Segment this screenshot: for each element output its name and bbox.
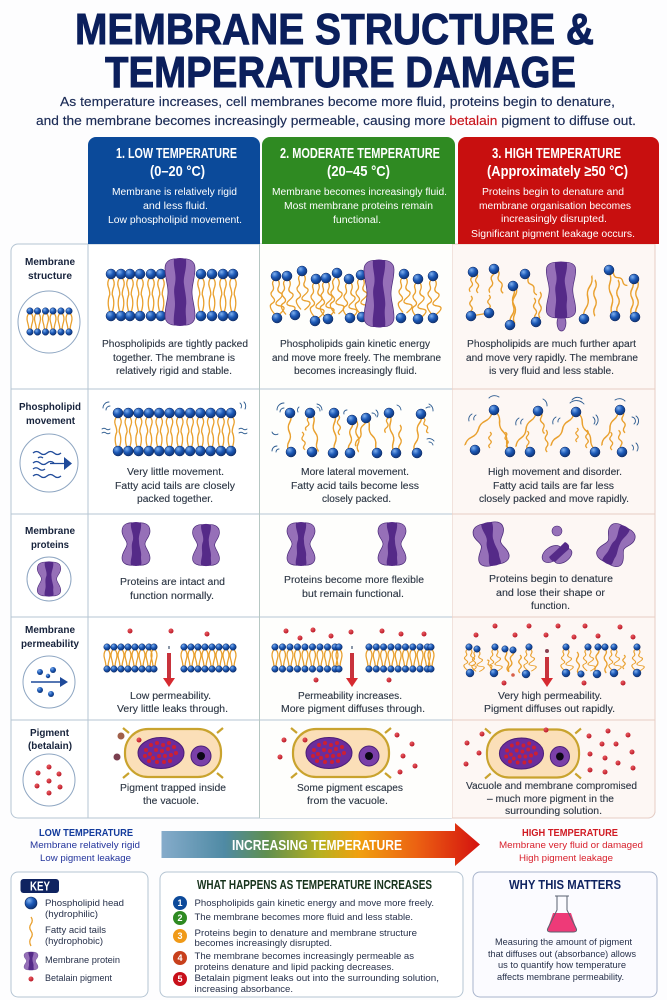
column header: low temperature: (0–20 °C) <box>150 163 205 180</box>
subtitle: As temperature increases, cell membranes become more fluid, proteins begin to denature, <box>60 94 615 109</box>
key: fatty acid tails: Fatty acid tails <box>45 925 106 936</box>
column header: low temperature: 1. LOW TEMPERATURE <box>116 145 237 162</box>
step 4: proteins denature and lipid packing decreases. <box>194 962 394 973</box>
step 4 <box>173 951 414 973</box>
text: fluid membrane: and move more freely. The membrane <box>272 353 441 364</box>
text: some pigment escapes <box>297 783 403 807</box>
title: MEMBRANE STRUCTURE & <box>75 5 594 54</box>
diagram: high movement and disorder <box>464 396 639 457</box>
text: trapped pigment: Pigment trapped inside <box>120 783 226 794</box>
text: flexible proteins: Proteins become more flexible <box>284 575 424 586</box>
low temperature summary: Low pigment leakage <box>40 853 131 864</box>
diagram: disordered membrane with damaged protein <box>466 261 640 331</box>
text: very little movement <box>115 467 235 505</box>
row label: membrane proteins: proteins <box>31 539 69 551</box>
row label: membrane permeability <box>21 624 79 650</box>
text: compromised cell: surrounding solution. <box>505 806 602 817</box>
icon: flask <box>547 896 577 932</box>
text: increased permeability: Permeability increases. <box>298 691 402 702</box>
text: very high permeability: Very high permeability. <box>498 691 602 702</box>
text: intact proteins <box>120 577 225 602</box>
text: increased permeability: More pigment diffuses through. <box>281 704 425 715</box>
arrow: increasing temperature <box>162 823 480 866</box>
text: some pigment escapes: from the vacuole. <box>307 796 388 807</box>
text: fluid membrane: becomes increasingly fluid. <box>294 366 417 377</box>
text: rigid membrane: Phospholipids are tightly packed <box>102 339 248 350</box>
key: membrane protein: Membrane protein <box>45 955 120 966</box>
text: increased permeability <box>281 691 425 715</box>
heading: WHY THIS MATTERS <box>509 877 621 892</box>
heading: WHAT HAPPENS AS TEMPERATURE INCREASES <box>197 877 432 892</box>
column header: low temperature: and less fluid. <box>143 201 208 212</box>
key: betalain pigment: Betalain pigment <box>45 973 112 984</box>
column header: moderate temperature: Membrane becomes increasingly fluid. <box>272 187 447 198</box>
row label: membrane structure: Membrane <box>25 256 75 268</box>
key: fatty acid tails <box>30 917 106 947</box>
step 5: increasing absorbance. <box>194 984 293 995</box>
column header: high temperature: increasingly disrupted. <box>501 214 607 225</box>
row label: membrane permeability: Membrane <box>25 624 75 636</box>
panel: what happens <box>160 872 463 997</box>
column header: low temperature: Membrane is relatively rigid <box>112 187 237 198</box>
column header: moderate temperature: 2. MODERATE TEMPERATURE <box>280 145 440 162</box>
text: why this matters: that diffuses out (absorbance) allows <box>488 949 636 960</box>
step 2: 2 <box>177 913 183 923</box>
row label: membrane structure: structure <box>28 270 72 282</box>
step 2: The membrane becomes more fluid and less stable. <box>194 912 413 923</box>
text: very high permeability: Pigment diffuses out rapidly. <box>484 704 615 715</box>
row label: membrane structure <box>25 256 75 282</box>
diagram: cell with trapped pigment <box>114 728 223 778</box>
text: why this matters: us to quantify how temperature <box>498 960 626 971</box>
text: why this matters: Measuring the amount of pigment <box>495 937 632 948</box>
text: intact proteins: function normally. <box>130 591 214 602</box>
row label: pigment betalain <box>28 727 72 752</box>
column header: high temperature: Significant pigment leakage occurs. <box>471 229 635 240</box>
row label: membrane proteins: Membrane <box>25 525 75 537</box>
text: denaturing proteins: function. <box>531 601 570 612</box>
text: disordered membrane: Phospholipids are much further apart <box>467 339 636 350</box>
diagram: very high permeability <box>464 624 644 687</box>
row label: membrane permeability: permeability <box>21 638 79 650</box>
text: high movement: Fatty acid tails are far less <box>493 481 614 492</box>
text: high movement: High movement and disorder. <box>488 467 622 478</box>
text: flexible proteins: but remain functional. <box>302 589 404 600</box>
text: trapped pigment <box>120 783 226 807</box>
column header: high temperature: (Approximately ≥50 °C) <box>487 163 628 180</box>
step 3 <box>173 928 417 949</box>
text: low permeability <box>117 691 228 715</box>
text: denaturing proteins <box>489 574 613 612</box>
diagram: intact proteins <box>122 522 219 566</box>
step 5: Betalain pigment leaks out into the surrounding solution, <box>194 973 439 984</box>
icon: protein <box>27 557 71 601</box>
low temperature summary <box>30 828 140 864</box>
text: high movement <box>479 467 629 505</box>
subtitle: and the membrane becomes increasingly permeable, causing more betalain pigment to diffuse out. <box>36 113 636 128</box>
row label: pigment betalain: Pigment <box>30 727 69 739</box>
text: very high permeability <box>484 691 615 715</box>
step 3: Proteins begin to denature and membrane structure <box>194 928 417 939</box>
panel: why this matters <box>473 872 657 997</box>
step 4: The membrane becomes increasingly permeable as <box>194 951 414 962</box>
icon: mini bilayer <box>18 291 80 353</box>
step 3: 3 <box>177 931 183 941</box>
text: disordered membrane: is very fluid and less stable. <box>489 366 614 377</box>
diagram: cell with some escaped pigment <box>278 728 418 778</box>
text: very little movement: Fatty acid tails are closely <box>115 481 235 492</box>
column header: moderate temperature: functional. <box>333 215 381 226</box>
column header: high temperature <box>458 137 659 244</box>
text: rigid membrane: together. The membrane is <box>113 353 235 364</box>
arrow: increasing temperature: INCREASING TEMPERATURE <box>232 837 402 854</box>
row label: phospholipid movement: Phospholipid <box>19 401 81 413</box>
text: flexible proteins <box>284 575 424 600</box>
text: intact proteins: Proteins are intact and <box>120 577 225 588</box>
key badge: KEY <box>30 878 50 894</box>
column header: high temperature: membrane organisation becomes <box>479 201 631 212</box>
step 5: 5 <box>177 974 183 984</box>
text: more lateral movement: closely packed. <box>322 494 391 505</box>
panel: comparison grid background <box>11 244 655 818</box>
diagram: rigid membrane with protein <box>106 258 238 326</box>
text: denaturing proteins: and lose their shape or <box>496 588 606 599</box>
diagram: more lateral movement <box>272 403 434 458</box>
column header: high temperature: 3. HIGH TEMPERATURE <box>492 145 621 162</box>
high temperature summary: Membrane very fluid or damaged <box>499 840 643 851</box>
row label: membrane proteins <box>25 525 75 551</box>
text: very little movement: Very little movement. <box>127 467 224 478</box>
diagram: flexible proteins <box>287 522 406 566</box>
step 3: becomes increasingly disrupted. <box>194 938 332 949</box>
column header: low temperature <box>88 137 260 244</box>
text: very little movement: packed together. <box>137 494 213 505</box>
text: low permeability: Low permeability. <box>130 691 211 702</box>
text: fluid membrane <box>272 339 441 377</box>
text: compromised cell: Vacuole and membrane compromised <box>466 781 637 792</box>
high temperature summary <box>499 828 643 864</box>
text: more lateral movement <box>291 467 419 505</box>
text: compromised cell: – much more pigment in the <box>487 794 614 805</box>
text: high movement: closely packed and move rapidly. <box>479 494 629 505</box>
text: disordered membrane <box>466 339 638 377</box>
text: why this matters: affects membrane permeability. <box>497 972 624 983</box>
diagram: very little movement <box>102 402 247 456</box>
text: trapped pigment: the vacuole. <box>143 796 199 807</box>
row label: phospholipid movement <box>19 401 81 427</box>
step 5 <box>173 972 439 995</box>
key: phospholipid head: (hydrophilic) <box>45 909 98 920</box>
text: denaturing proteins: Proteins begin to denature <box>489 574 613 585</box>
icon: movement waves with arrow <box>20 434 78 492</box>
key: fatty acid tails: (hydrophobic) <box>45 936 103 947</box>
panel: key <box>11 872 148 997</box>
text: rigid membrane: relatively rigid and stable. <box>116 366 232 377</box>
text: fluid membrane: Phospholipids gain kinetic energy <box>280 339 430 350</box>
key: phospholipid head <box>25 897 124 920</box>
text: more lateral movement: Fatty acid tails become less <box>291 481 419 492</box>
row label: phospholipid movement: movement <box>26 415 75 427</box>
high temperature summary: HIGH TEMPERATURE <box>522 828 618 839</box>
text: why this matters <box>488 937 636 983</box>
diagram: low permeability <box>104 628 236 687</box>
text: compromised cell <box>466 781 637 817</box>
column header: moderate temperature <box>262 137 455 244</box>
text: rigid membrane <box>102 339 248 377</box>
low temperature summary: Membrane relatively rigid <box>30 840 140 851</box>
column header: moderate temperature: Most membrane proteins remain <box>284 201 433 212</box>
diagram: denaturing proteins <box>471 519 638 570</box>
diagram: increased permeability <box>272 628 434 687</box>
title <box>75 5 594 97</box>
text: disordered membrane: and move very rapidly. The membrane <box>466 353 638 364</box>
column header: low temperature: Low phospholipid movement. <box>108 215 242 226</box>
diagram: compromised cell with much pigment <box>464 728 636 778</box>
text: more lateral movement: More lateral movement. <box>301 467 409 478</box>
step 1: Phospholipids gain kinetic energy and move more freely. <box>194 898 434 909</box>
text: some pigment escapes: Some pigment escapes <box>297 783 403 794</box>
step 4: 4 <box>177 953 183 963</box>
diagram: fluid membrane with protein <box>270 260 441 328</box>
title: TEMPERATURE DAMAGE <box>105 48 576 97</box>
row label: pigment betalain: (betalain) <box>28 740 72 752</box>
column header: moderate temperature: (20–45 °C) <box>327 163 390 180</box>
high temperature summary: High pigment leakage <box>519 853 613 864</box>
low temperature summary: LOW TEMPERATURE <box>39 828 133 839</box>
subtitle <box>36 94 636 128</box>
key: phospholipid head: Phospholipid head <box>45 898 124 909</box>
icon: pigment dots <box>23 754 75 806</box>
icon: permeability dots and arrow <box>23 656 75 708</box>
step 1: 1 <box>177 898 183 908</box>
text: low permeability: Very little leaks through. <box>117 704 228 715</box>
column header: high temperature: Proteins begin to denature and <box>482 187 624 198</box>
